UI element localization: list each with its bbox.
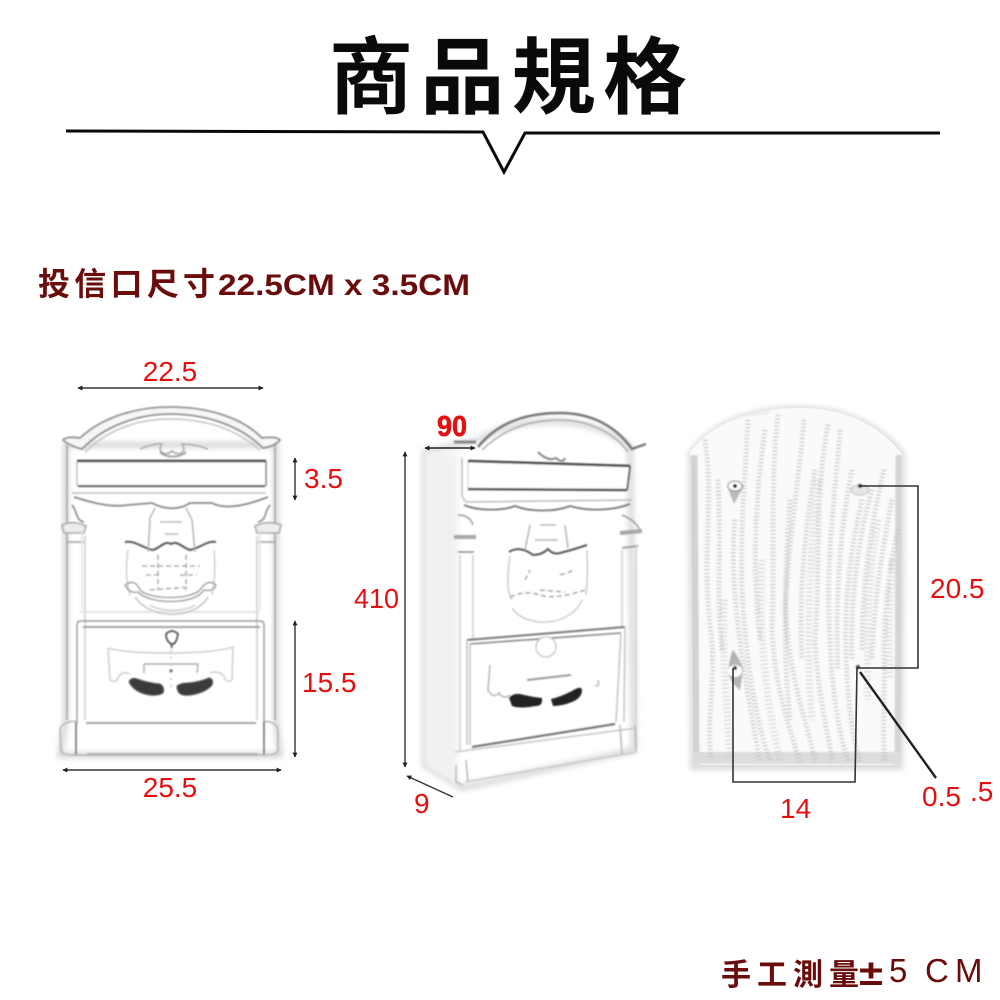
- back view: leader line: [860, 672, 936, 778]
- angled view: viewing windows: [509, 688, 582, 708]
- dimension: clipped label .5: .5: [970, 776, 993, 807]
- mailbox back view: [688, 406, 936, 782]
- dimension: width 25.5: 25.5: [143, 772, 197, 803]
- back view: mounting holes: [727, 481, 869, 690]
- dimension: door height 15.5: [295, 621, 356, 757]
- dimension: depth 9: [407, 776, 453, 819]
- angled view: coat of arms: [508, 525, 587, 622]
- back view: wood grain: [692, 410, 902, 765]
- dimension: hole spacing 20.5: 20.5: [930, 573, 984, 604]
- mailbox front view: [60, 407, 281, 755]
- angled view: line art: [454, 413, 646, 750]
- dimension: hole spacing 14: 14: [780, 793, 811, 824]
- dimension: slot height 3.5: 3.5: [304, 463, 343, 494]
- measurement tolerance note: [721, 952, 982, 993]
- title: 商品規格: [329, 31, 687, 125]
- dimension: depth label 90: 90: [437, 411, 467, 443]
- angled view: door panel: [455, 627, 636, 785]
- front view: door panel: [77, 621, 264, 724]
- back view: panel shadow: [688, 406, 905, 770]
- back view: spacing lines: [733, 486, 918, 782]
- front view: letter slot: [77, 461, 266, 487]
- title divider with pointer: [66, 131, 940, 172]
- dimension: depth label 90: [425, 411, 475, 448]
- opening size note: 22.5CM x 3.5CM: [218, 269, 470, 302]
- dimension: slot height 3.5: [295, 458, 343, 500]
- front view: coat of arms: [125, 508, 216, 614]
- back view: panel: [690, 408, 903, 765]
- measurement tolerance note: 5 CM: [889, 952, 982, 989]
- dimension: depth 9: 9: [414, 788, 430, 819]
- opening size note: [38, 266, 470, 302]
- angled view: letter slot: [468, 461, 630, 490]
- front view: body shadow: [60, 445, 280, 755]
- front view: viewing windows: [129, 678, 213, 695]
- dimension: slot width 22.5: 22.5: [143, 356, 197, 387]
- measurement tolerance note: ±: [859, 952, 883, 993]
- angled view: side panel shading: [425, 452, 458, 785]
- measurement tolerance note: 手工測量: [721, 959, 859, 992]
- mailbox angled view: [425, 413, 646, 788]
- angled view: shadow: [425, 422, 634, 788]
- dimension: door height 15.5: 15.5: [302, 667, 356, 698]
- opening size note: 投信口尺寸: [38, 266, 215, 302]
- front view: line art: [60, 407, 281, 755]
- dimension: hole size 0.5: 0.5: [922, 781, 961, 812]
- dimension: height 410: 410: [354, 583, 399, 614]
